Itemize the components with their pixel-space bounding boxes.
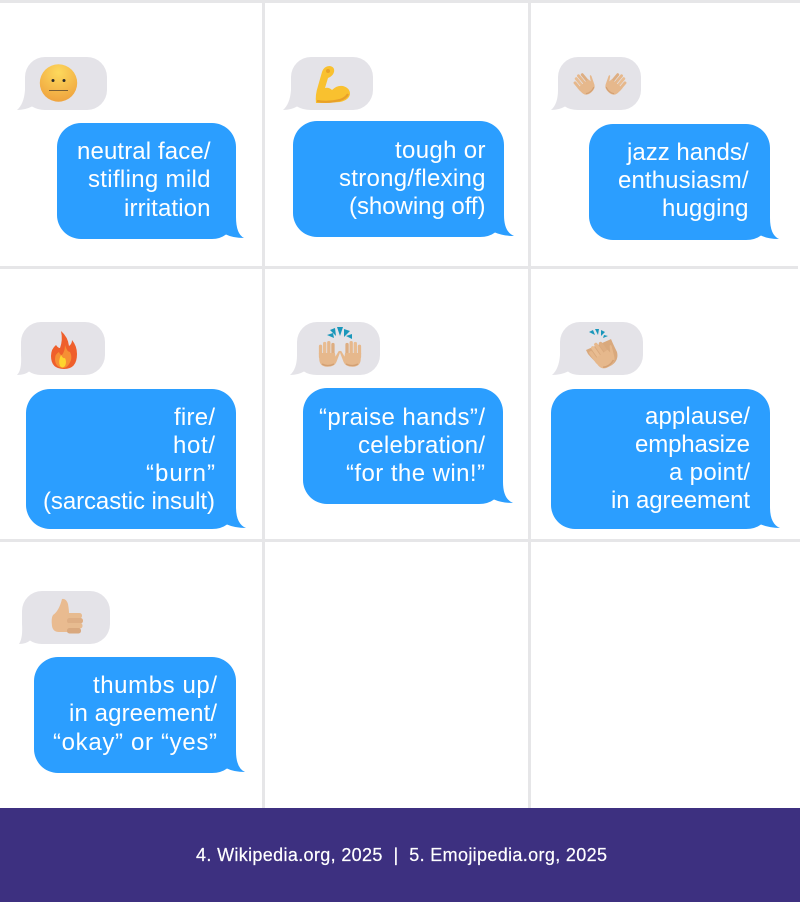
text: clapping hands meaning: in agreement <box>611 487 750 514</box>
text: fire meaning: (sarcastic insult) <box>43 488 215 515</box>
gray bubble: clapping hands <box>552 322 643 375</box>
panel: clapping hands <box>551 322 780 529</box>
blue bubble: neutral face meaning <box>57 123 244 239</box>
text: fire meaning: fire/ <box>174 404 215 431</box>
blue bubble: thumbs up meaning <box>34 657 245 773</box>
text: fire meaning: hot/ <box>173 432 215 459</box>
icon: praise hands <box>319 327 361 367</box>
blue bubble: fire meaning <box>26 389 246 529</box>
text: thumbs up meaning: in agreement/ <box>69 700 217 727</box>
icon: fire <box>51 331 77 369</box>
icon: clapping hands <box>586 329 620 372</box>
blue bubble: clapping hands meaning <box>551 389 780 529</box>
text: jazz hands meaning: hugging <box>662 195 748 222</box>
text: flexed biceps meaning: tough or <box>395 137 486 164</box>
text: jazz hands meaning: enthusiasm/ <box>618 167 749 194</box>
text: neutral face meaning <box>77 138 211 222</box>
text: thumbs up meaning <box>53 672 217 756</box>
panel: neutral face <box>17 57 244 239</box>
text: neutral face meaning: stifling mild <box>88 166 210 193</box>
icon: flexed biceps <box>316 66 350 103</box>
panel: jazz hands <box>551 57 779 240</box>
text: clapping hands meaning: emphasize <box>635 431 750 458</box>
text: clapping hands meaning: a point/ <box>669 459 750 486</box>
panel: fire <box>17 322 246 529</box>
gray bubble: praise hands <box>290 322 380 375</box>
text: thumbs up meaning: “okay” or “yes” <box>53 729 217 756</box>
gray bubble: fire <box>17 322 105 375</box>
text: flexed biceps meaning <box>339 137 486 220</box>
gray bubble: jazz hands <box>551 57 641 110</box>
text: jazz hands meaning: jazz hands/ <box>626 139 749 166</box>
text: thumbs up meaning: thumbs up/ <box>93 672 217 699</box>
text: praise hands meaning: celebration/ <box>358 432 485 459</box>
text: praise hands meaning: “praise hands”/ <box>319 404 485 431</box>
panel: flexed biceps <box>283 57 514 237</box>
icon: jazz hands <box>571 68 629 97</box>
text: clapping hands meaning <box>611 403 750 514</box>
text: neutral face meaning: neutral face/ <box>77 138 211 165</box>
text: jazz hands meaning <box>618 139 749 222</box>
text: clapping hands meaning: applause/ <box>645 403 750 430</box>
text: fire meaning: “burn” <box>146 460 215 487</box>
footer sources: 4. Wikipedia.org, 2025 | 5. Emojipedia.org, 2025 <box>196 845 607 865</box>
blue bubble: flexed biceps meaning <box>293 121 514 237</box>
text: flexed biceps meaning: (showing off) <box>349 193 486 220</box>
text: praise hands meaning <box>319 404 485 487</box>
text: neutral face meaning: irritation <box>124 195 210 222</box>
icon: thumbs up <box>52 599 83 634</box>
gray bubble: thumbs up <box>19 591 110 644</box>
blue bubble: jazz hands meaning <box>589 124 779 240</box>
text: flexed biceps meaning: strong/flexing <box>339 165 486 192</box>
gray bubble: neutral face <box>17 57 107 110</box>
gray bubble: flexed biceps <box>283 57 373 110</box>
text: fire meaning <box>43 404 215 515</box>
panel: praise hands <box>290 322 513 504</box>
text: praise hands meaning: “for the win!” <box>346 460 485 487</box>
footer <box>0 808 800 902</box>
blue bubble: praise hands meaning <box>303 388 513 504</box>
icon: neutral face <box>40 64 77 102</box>
panel: thumbs up <box>19 591 245 773</box>
